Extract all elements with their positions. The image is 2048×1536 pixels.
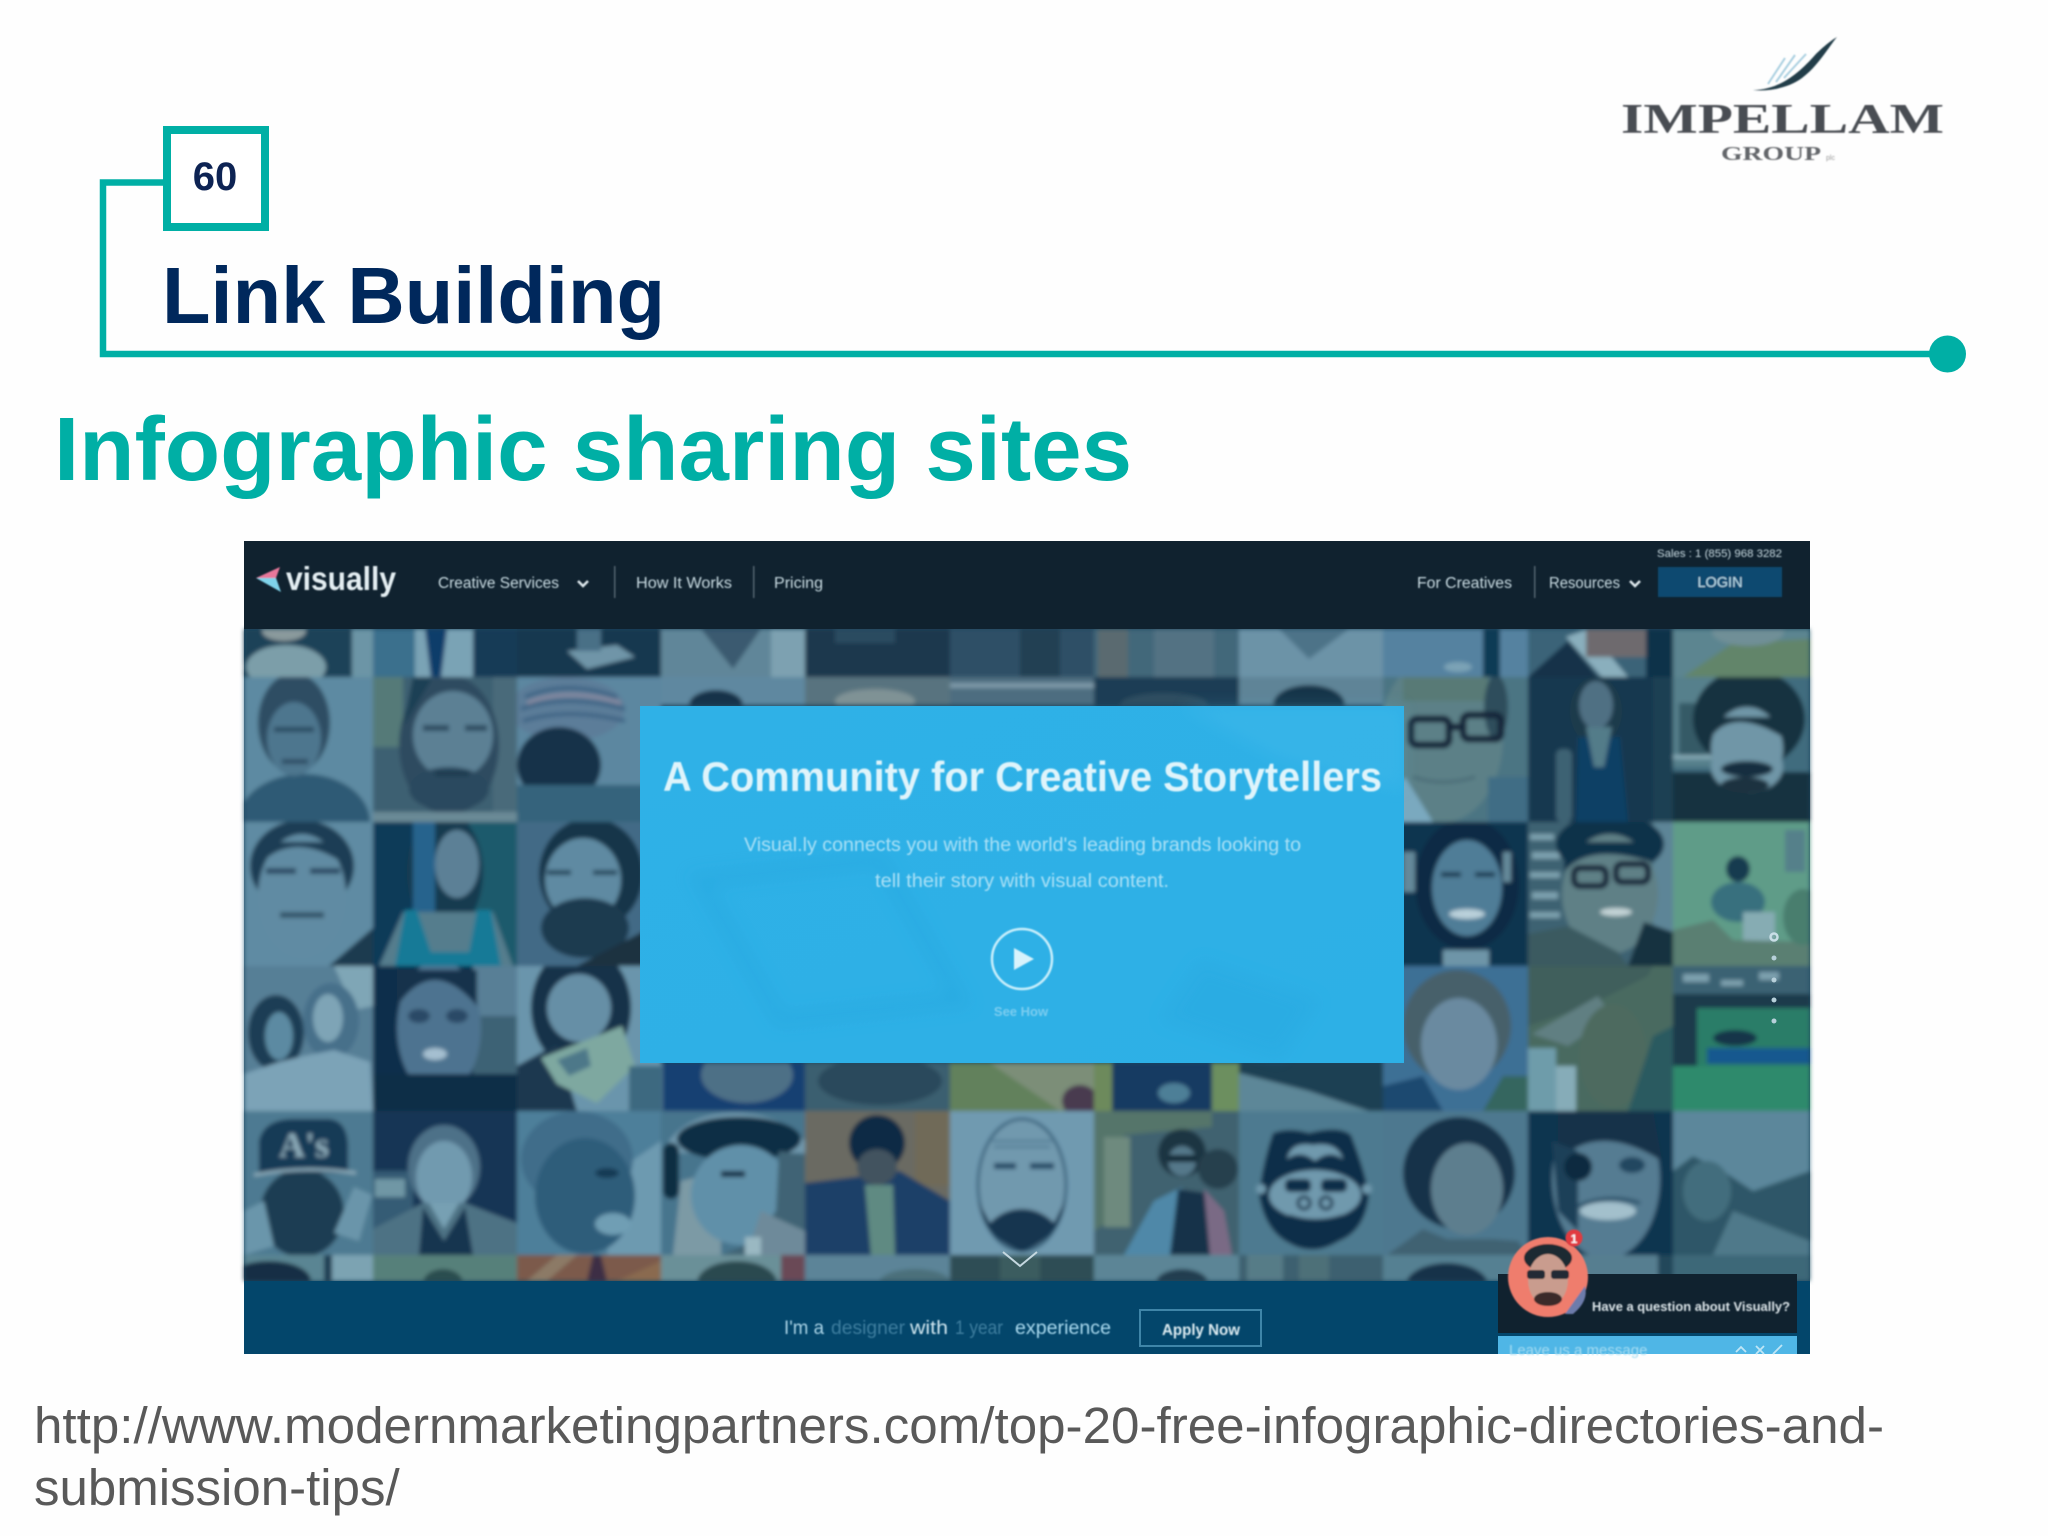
row 3 photos [244, 946, 1810, 1117]
nav divider [753, 566, 754, 598]
hero sub text [744, 835, 1301, 892]
header frame connector line with end dot [103, 182, 1966, 372]
hero heading: A Community for Creative Storytellers [663, 753, 1382, 800]
visually wordmark: visually [286, 560, 397, 597]
slide number box: 60 [193, 155, 237, 199]
source url text: submission-tips/ [34, 1459, 400, 1516]
bottom bar statement: 1 year [955, 1318, 1004, 1339]
logo: Impellam Group: IMPELLAM [1621, 97, 1944, 143]
chat dark panel [1498, 1274, 1797, 1333]
row 0 partial photos [244, 618, 1810, 689]
nav link: Creative Services: Creative Services [438, 575, 559, 592]
nav link: Resources: Resources [1549, 575, 1620, 592]
bottom bar statement: experience [1015, 1318, 1111, 1339]
nav bar [244, 541, 1810, 629]
chat prompt: Have a question about Visually? [1592, 1299, 1790, 1314]
nav link: How It Works: How It Works [636, 575, 732, 592]
bottom bar statement: I'm a [784, 1318, 824, 1339]
slide title: Infographic sharing sites: Infographic sharing sites [54, 400, 1132, 500]
box texture [700, 706, 1404, 1060]
nav link: For Creatives: For Creatives [1417, 575, 1512, 592]
scroll down chevron [1003, 1252, 1037, 1266]
notification badge [1566, 1230, 1582, 1246]
apply now button: Apply Now [1162, 1322, 1241, 1339]
visually logo mark [256, 567, 281, 592]
nav link: Pricing: Pricing [774, 575, 823, 592]
row 4 photos: A's [279, 1125, 329, 1165]
nav chevron [578, 581, 588, 586]
agent avatar [1508, 1237, 1588, 1317]
chat message bar [1498, 1336, 1797, 1359]
logo: Impellam Group [1621, 37, 1944, 165]
notification badge: 1 [1571, 1232, 1578, 1246]
bottom bar statement: with [909, 1318, 948, 1339]
row 4 photos [244, 1099, 1810, 1259]
carousel pagination dots [1770, 934, 1778, 1024]
play button [992, 929, 1052, 989]
row 5 partial photos [227, 1255, 1810, 1311]
website screenshot: visually [227, 541, 1823, 1359]
nav divider [1534, 566, 1536, 598]
apply now button [1140, 1310, 1261, 1346]
bottom bar statement: designer [831, 1318, 906, 1339]
sales phone: Sales : 1 (855) 968 3282 [1657, 548, 1782, 560]
source url text [34, 1397, 1884, 1516]
row 1 photos [238, 655, 1810, 870]
nav content [256, 548, 1782, 598]
bottom bar [244, 1281, 1810, 1354]
hero sub text: Visual.ly connects you with the world's leading brands looking to [744, 835, 1301, 856]
logo: Impellam Group: plc [1826, 155, 1835, 162]
login button [1658, 567, 1782, 597]
chat message bar: Leave us a message [1509, 1342, 1647, 1359]
hero blue box [640, 706, 1404, 1063]
photo mosaic of creatives [227, 618, 1823, 1311]
hero sub text: tell their story with visual content. [875, 871, 1169, 892]
nav divider [614, 566, 616, 598]
see how label: See How [994, 1004, 1049, 1019]
row 2 photos [244, 812, 1823, 966]
login button: LOGIN [1697, 575, 1743, 591]
source url text: http://www.modernmarketingpartners.com/top-20-free-infographic-directories-and- [34, 1397, 1884, 1454]
slide number box [167, 130, 265, 227]
chat widget [1498, 1230, 1797, 1359]
logo: Impellam Group: GROUP [1721, 143, 1821, 165]
nav chevron [1630, 581, 1640, 586]
bottom bar statement [784, 1318, 1111, 1339]
section heading: Link Building: Link Building [162, 251, 665, 340]
